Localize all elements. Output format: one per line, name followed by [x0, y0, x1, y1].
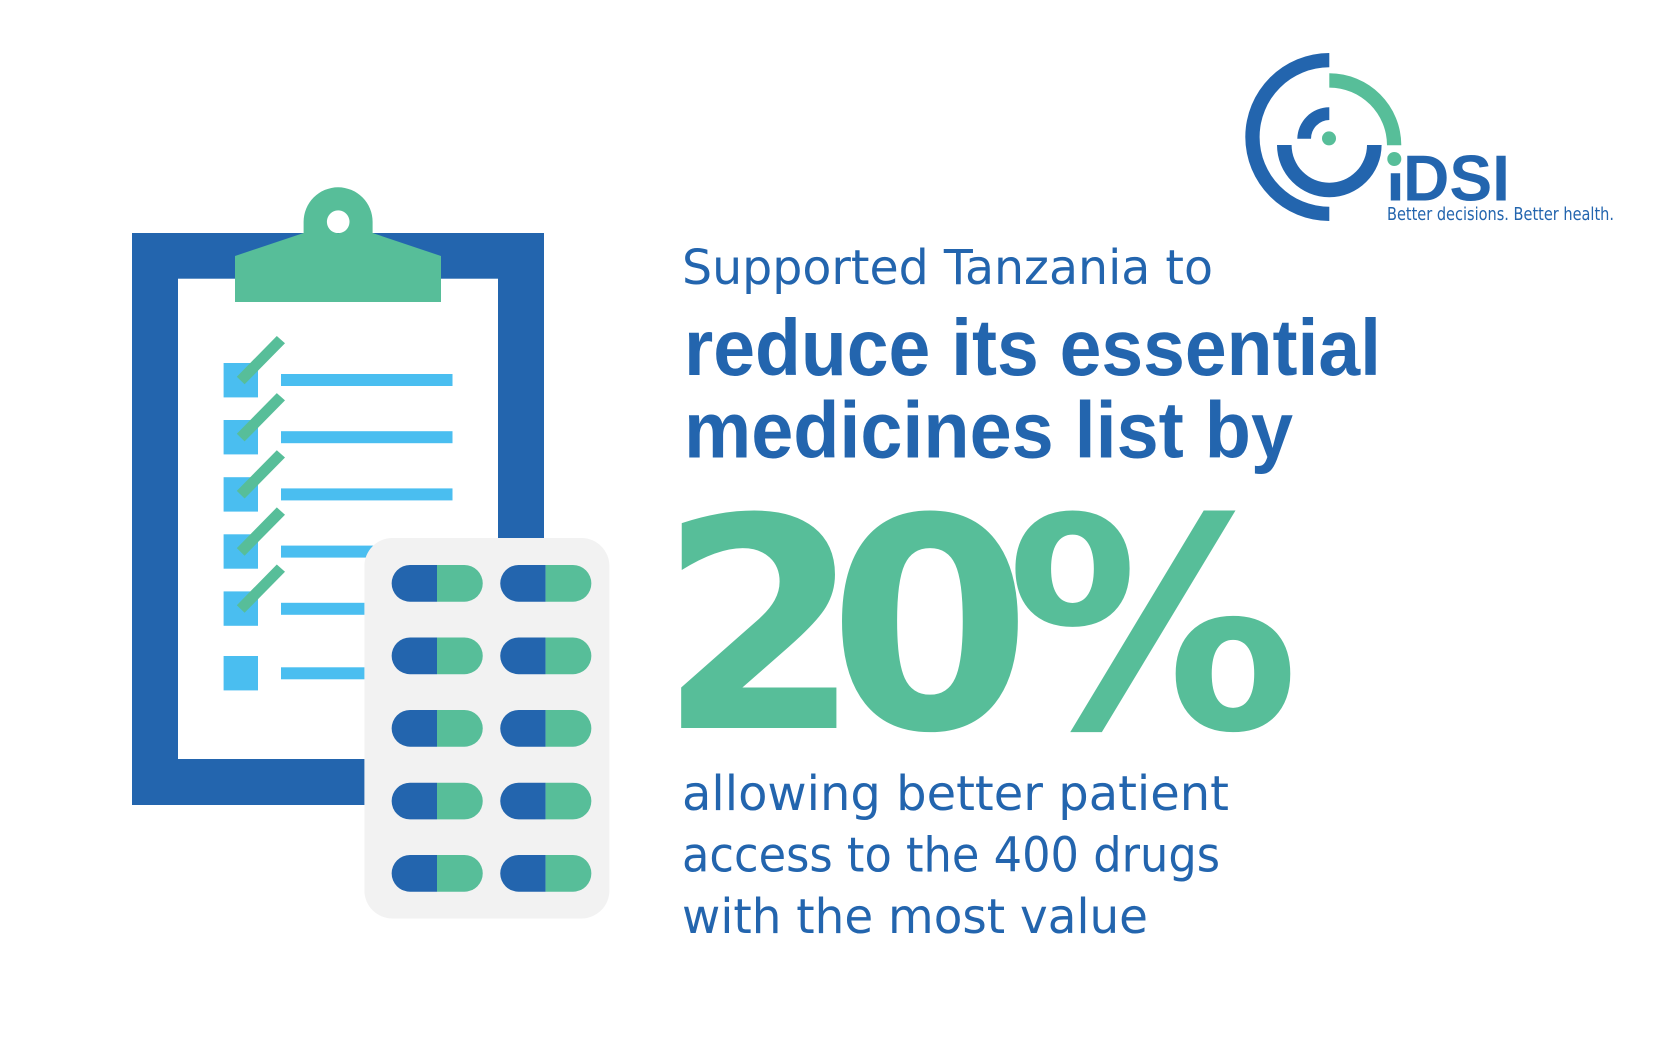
- checklist row 5: [224, 564, 452, 626]
- headline: [684, 303, 1381, 474]
- headline: reduce its essential: [684, 303, 1381, 392]
- checklist row 2: [224, 393, 452, 454]
- checklist row 1: [224, 336, 452, 397]
- checklist row 4: [224, 507, 452, 569]
- intro line: Supported Tanzania to: [682, 240, 1213, 296]
- icon: clipboard checklist: [132, 187, 544, 805]
- logo outer arc: [1245, 53, 1329, 221]
- checklist row 6: [224, 656, 452, 690]
- logo wordmark: [1387, 152, 1506, 201]
- logo green arc: [1329, 73, 1401, 145]
- logo small arc: [1297, 107, 1329, 139]
- headline: medicines list by: [684, 386, 1293, 474]
- clipboard clip: [235, 187, 441, 302]
- capsules: [392, 565, 591, 892]
- logo centre dot: [1322, 131, 1336, 145]
- clipboard board: [132, 233, 544, 805]
- logo wordmark: i: [1386, 154, 1405, 213]
- logo wordmark: DSI: [1403, 142, 1510, 215]
- checklist row 3: [224, 450, 452, 512]
- closing text: with the most value: [682, 889, 1148, 945]
- closing text: [682, 766, 1229, 945]
- icon: blister pack of capsules: [364, 538, 609, 918]
- closing text: allowing better patient: [682, 766, 1229, 822]
- big statistic 20%: 20%: [658, 457, 1300, 798]
- logo inner half ring: [1277, 145, 1382, 197]
- clipboard paper: [178, 279, 498, 759]
- blister card: [364, 538, 609, 918]
- closing text: access to the 400 drugs: [682, 828, 1220, 884]
- logo: iDSI: [1245, 53, 1614, 225]
